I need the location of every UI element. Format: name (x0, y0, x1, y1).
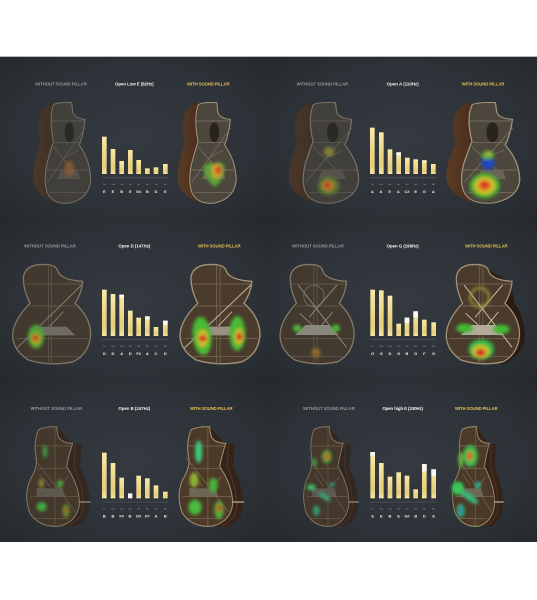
bar chart: 7th (423, 345, 427, 348)
bar chart: 8th (164, 183, 168, 186)
bar chart: G (432, 351, 435, 356)
bar chart: A (146, 351, 149, 356)
bar chart: F# (119, 513, 125, 518)
bar chart: 6th (146, 345, 150, 348)
bar chart: 6th (414, 345, 418, 348)
label: note title: Open D (147Hz) (118, 244, 151, 249)
bar chart: 8th (432, 345, 436, 348)
bar chart: 1st (371, 345, 374, 348)
bar chart: C (155, 351, 158, 356)
bar chart: 3rd (120, 507, 124, 510)
bar chart: 4th (397, 345, 401, 348)
label: with sound pillar: WITH SOUND PILLAR (190, 406, 234, 411)
bar chart: D (414, 351, 417, 356)
bar chart: 2nd (111, 346, 116, 348)
label: without sound pillar: WITHOUT SOUND PILLAR (35, 82, 88, 87)
bar chart: 7th (423, 183, 427, 186)
bar chart: E (164, 189, 167, 194)
label: note title: Open G (196Hz) (387, 244, 419, 249)
bar chart: 1st (371, 183, 374, 186)
label: note title: Open high E (330Hz) (382, 406, 424, 411)
bar chart (370, 290, 436, 356)
bar chart: 3rd (120, 345, 124, 348)
bar chart: 4th (397, 507, 401, 510)
bar chart: E (371, 513, 374, 518)
bar chart: 4th (397, 183, 401, 186)
guitar with sound pillar (446, 103, 520, 203)
bar chart (370, 128, 436, 194)
guitar without sound pillar (33, 103, 91, 203)
guitar without sound pillar (304, 427, 359, 527)
bar chart: 5th (405, 345, 409, 348)
bar chart: A (397, 189, 400, 194)
bar chart: D# (136, 513, 142, 518)
label: with sound pillar: WITH SOUND PILLAR (187, 82, 231, 87)
guitar without sound pillar (13, 264, 91, 364)
label: with sound pillar: WITH SOUND PILLAR (198, 244, 242, 249)
label: without sound pillar: WITHOUT SOUND PILLAR (24, 244, 77, 249)
guitar with sound pillar (452, 427, 504, 527)
panel: Open high E (268, 380, 537, 542)
label: note title: Open B (247Hz) (118, 406, 151, 411)
bar chart: A (155, 513, 158, 518)
bar chart: E (388, 189, 391, 194)
bar chart: B (112, 513, 115, 518)
guitar without sound pillar (289, 103, 359, 203)
bar chart: G (371, 351, 374, 356)
bar chart: E (432, 513, 435, 518)
bar chart: E (103, 189, 106, 194)
bar chart: 1st (103, 507, 106, 510)
bar chart: G (380, 351, 383, 356)
bar chart: 8th (432, 507, 436, 510)
bar chart: 6th (414, 507, 418, 510)
bar chart: A (432, 189, 435, 194)
bar chart: F# (136, 351, 142, 356)
label: with sound pillar: WITH SOUND PILLAR (462, 82, 505, 87)
guitar with sound pillar (179, 427, 244, 527)
bar chart: 1st (103, 183, 106, 186)
bar chart: B (406, 351, 409, 356)
bar chart: 3rd (388, 183, 392, 186)
bar chart: 8th (164, 345, 168, 348)
bar chart: B (414, 513, 417, 518)
bar chart (370, 452, 436, 518)
bar chart: 4th (129, 345, 133, 348)
bar chart: D (423, 513, 426, 518)
bar chart: 7th (423, 507, 427, 510)
bar chart: 4th (129, 183, 133, 186)
bar chart: 6th (146, 183, 150, 186)
bar chart: 5th (405, 507, 409, 510)
bar chart: G# (136, 189, 142, 194)
guitar without sound pillar (27, 427, 91, 527)
panel: Open A (268, 57, 537, 220)
label: without sound pillar: WITHOUT SOUND PILLAR (30, 406, 83, 411)
bar chart: F (423, 351, 426, 356)
bar chart (102, 453, 168, 518)
bar chart: D (389, 351, 392, 356)
bar chart: 6th (146, 507, 150, 510)
bar chart: 8th (432, 183, 436, 186)
bar chart: B (120, 189, 123, 194)
bar chart: E (414, 189, 417, 194)
bar chart: 3rd (388, 345, 392, 348)
guitar with sound pillar (446, 264, 525, 365)
bar chart: 3rd (120, 183, 124, 186)
bar chart: 2nd (111, 184, 116, 186)
label: without sound pillar: WITHOUT SOUND PILLAR (296, 82, 349, 87)
bar chart: A (380, 189, 383, 194)
guitar without sound pillar (280, 264, 354, 364)
bar chart: 2nd (111, 508, 116, 510)
bar chart: A (120, 351, 123, 356)
bar chart: B (129, 513, 132, 518)
bar chart: E (397, 513, 400, 518)
label: note title: Open Low E (82Hz) (115, 82, 154, 87)
bar chart: D (112, 351, 115, 356)
bar chart: F# (145, 513, 150, 518)
bar chart: G (423, 189, 426, 194)
bar chart: 5th (137, 507, 141, 510)
bar chart: D (155, 189, 158, 194)
bar chart: E (129, 189, 132, 194)
bar chart: 5th (137, 183, 141, 186)
bar chart: E (112, 189, 115, 194)
guitar with sound pillar (180, 264, 260, 364)
bar chart: C# (404, 189, 410, 194)
bar chart: D (129, 351, 132, 356)
bar chart: 1st (371, 507, 374, 510)
panel: Open Low E (0, 57, 268, 220)
label: with sound pillar: WITH SOUND PILLAR (465, 244, 509, 249)
label: with sound pillar: WITH SOUND PILLAR (455, 406, 499, 411)
bar chart: 3rd (388, 507, 392, 510)
bar chart: 7th (154, 183, 158, 186)
bar chart: 5th (405, 183, 409, 186)
bar chart: 1st (103, 345, 106, 348)
bar chart: G (397, 351, 400, 356)
bar chart: B (146, 189, 149, 194)
bar chart: 6th (414, 183, 418, 186)
bar chart: 2nd (380, 346, 384, 348)
panel: Open D (0, 220, 268, 380)
panel: Open B (0, 380, 268, 542)
bar chart: B (389, 513, 392, 518)
bar chart: 7th (154, 345, 158, 348)
label: note title: Open A (110Hz) (387, 82, 419, 87)
bar chart: 4th (128, 507, 132, 510)
panel: Open G (268, 220, 537, 380)
bar chart: 8th (164, 507, 168, 510)
bar chart (102, 137, 168, 194)
bar chart: 2nd (379, 184, 384, 186)
bar chart: 5th (137, 345, 141, 348)
bar chart: D (164, 351, 167, 356)
bar chart (102, 290, 168, 356)
bar chart: A (371, 189, 374, 194)
bar chart: B (164, 513, 167, 518)
bar chart: B (103, 513, 106, 518)
guitar with sound pillar (178, 103, 236, 203)
bar chart: E (380, 513, 383, 518)
bar chart: 2nd (380, 508, 384, 510)
label: without sound pillar: WITHOUT SOUND PILLAR (303, 406, 356, 411)
bar chart: D (103, 351, 106, 356)
bar chart: 7th (154, 507, 158, 510)
label: without sound pillar: WITHOUT SOUND PILLAR (292, 244, 345, 249)
bar chart: G# (404, 513, 410, 518)
